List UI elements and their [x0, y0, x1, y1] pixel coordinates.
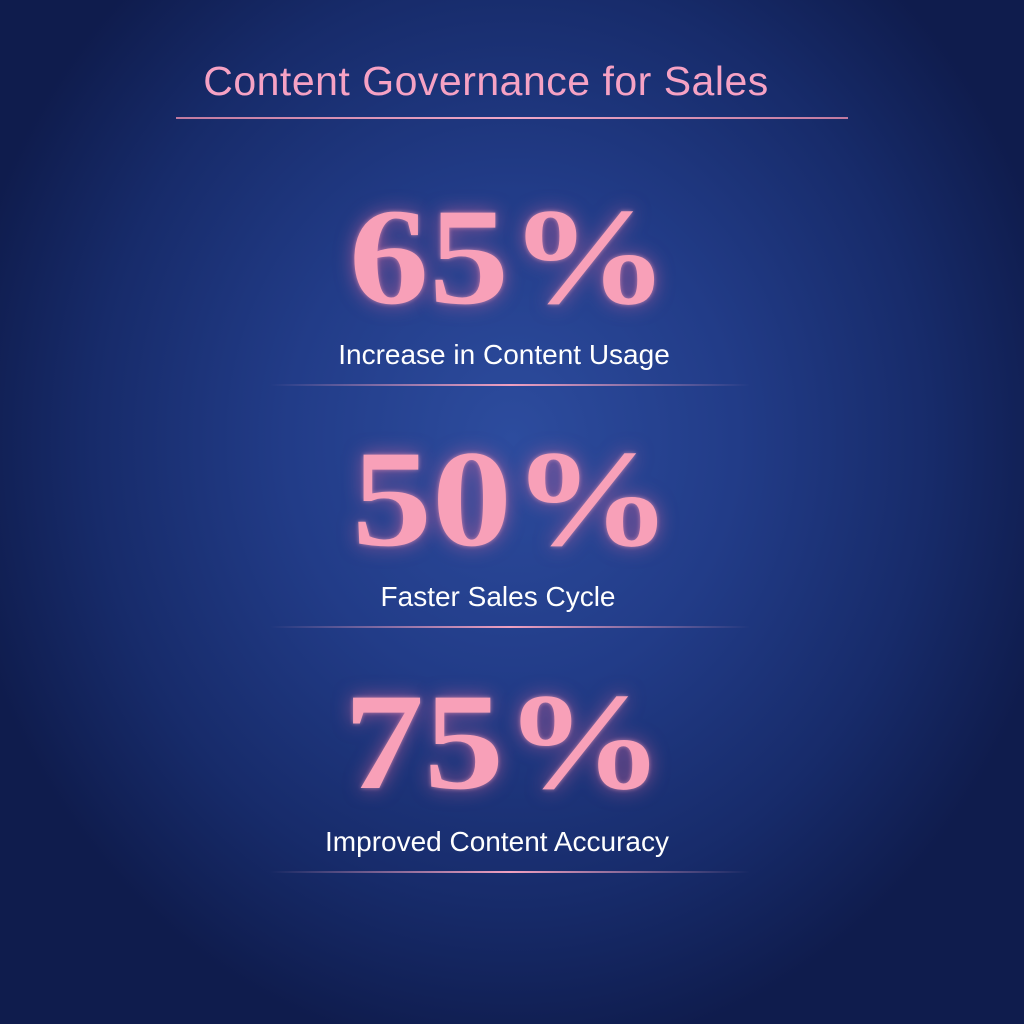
title: Content Governance for Sales [203, 58, 769, 104]
stat 2: 50% [352, 422, 672, 575]
stat 1: 65% [349, 180, 669, 333]
label 1: Increase in Content Usage [338, 339, 670, 370]
stat 3: 75% [344, 665, 664, 818]
label 2: Faster Sales Cycle [381, 581, 615, 612]
label 3: Improved Content Accuracy [325, 826, 669, 857]
